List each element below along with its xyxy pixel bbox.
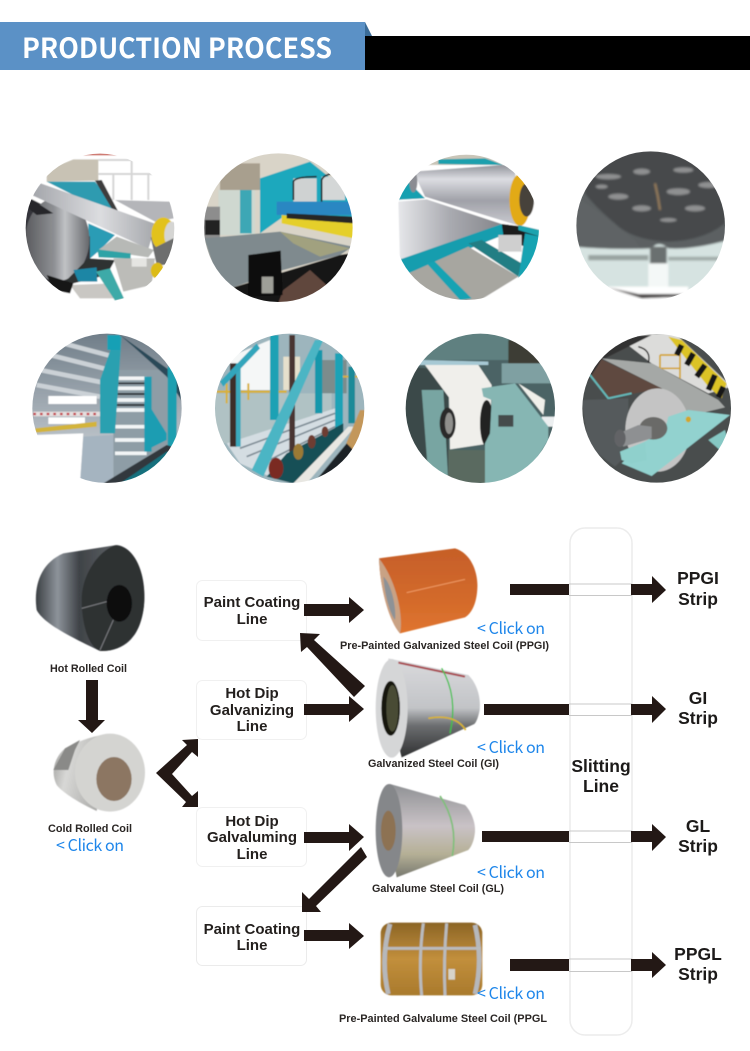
photo: galvanizing line rollers bbox=[213, 332, 367, 488]
arrow: GI to paint coating bbox=[300, 633, 365, 697]
box: paint coating line (top): Paint Coating bbox=[204, 594, 300, 611]
arrow: GL to paint coating bbox=[302, 847, 367, 912]
output: PPGL strip: Strip bbox=[678, 964, 718, 984]
link: click on: < Click on bbox=[477, 859, 545, 883]
link: click on: < Click on bbox=[477, 615, 545, 639]
output: PPGI strip: Strip bbox=[678, 589, 718, 609]
box: paint coating line (bottom): Line bbox=[237, 937, 267, 954]
photo: coil with shaft and yellow-black guard bbox=[580, 332, 733, 488]
arrows: cold rolled branch up and down bbox=[156, 739, 198, 807]
photo: steel coil uncoiling bbox=[23, 150, 179, 307]
box: hot dip galvaluming line: Line bbox=[237, 846, 267, 863]
output: GI strip: Strip bbox=[678, 708, 718, 728]
output: GI strip bbox=[678, 688, 718, 728]
output: PPGL strip bbox=[674, 944, 722, 984]
label: PPGL coil: Pre-Painted Galvalume Steel Coil (PPGL bbox=[339, 1013, 547, 1025]
box: hot dip galvaluming line bbox=[196, 808, 306, 866]
stage: cold rolled coil bbox=[48, 734, 145, 856]
output: GL strip bbox=[678, 816, 718, 856]
link: click on: < Click on bbox=[56, 832, 124, 856]
box: hot dip galvanizing line: Line bbox=[237, 718, 267, 735]
coil: PPGI orange bbox=[340, 548, 549, 652]
label: cold rolled coil: Cold Rolled Coil bbox=[48, 823, 132, 835]
photo: steel strip cooling tower bbox=[30, 332, 187, 488]
output: PPGI strip bbox=[677, 568, 719, 609]
photo: cutting machine with steel sheet bbox=[200, 150, 357, 307]
arrow: galvaluming to GL bbox=[304, 824, 364, 851]
output: GI strip: GI bbox=[689, 688, 707, 708]
box: hot dip galvaluming line: Galvaluming bbox=[207, 829, 297, 846]
photo: dark molten coating close-up bbox=[575, 150, 728, 303]
link: click on: < Click on bbox=[477, 980, 545, 1004]
box: hot dip galvanizing line: Galvanizing bbox=[210, 702, 294, 719]
arrow: paint coating to PPGI bbox=[304, 597, 364, 623]
box: hot dip galvanizing line: Hot Dip bbox=[225, 685, 279, 702]
label: GI coil: Galvanized Steel Coil (GI) bbox=[368, 758, 499, 770]
photo: white coil on recoiler bbox=[403, 332, 560, 488]
label: hot rolled coil: Hot Rolled Coil bbox=[50, 663, 127, 675]
photo: steel roll on conveyor bbox=[392, 153, 542, 303]
output: PPGL strip: PPGL bbox=[674, 944, 722, 964]
arrow: GI through slitting line bbox=[484, 696, 666, 723]
arrow: PPGL through slitting line bbox=[510, 952, 666, 978]
arrow: GL through slitting line bbox=[482, 824, 666, 851]
box: paint coating line (bottom): Paint Coating bbox=[204, 921, 300, 938]
output: PPGI strip: PPGI bbox=[677, 568, 719, 588]
output: GL strip: Strip bbox=[678, 836, 718, 856]
coil: GI galvanized bbox=[368, 658, 545, 770]
panel: slitting line: Line bbox=[583, 776, 619, 796]
section header banner bbox=[0, 22, 750, 70]
box: paint coating line (top): Line bbox=[237, 611, 267, 628]
box: paint coating line (top) bbox=[196, 580, 306, 640]
title: PRODUCTION PROCESS bbox=[22, 26, 332, 66]
arrow: paint coating to PPGL bbox=[304, 923, 364, 949]
output: GL strip: GL bbox=[686, 816, 710, 836]
box: hot dip galvanizing line bbox=[196, 680, 306, 740]
label: PPGI coil: Pre-Painted Galvanized Steel Coil (PPGI) bbox=[340, 640, 549, 652]
stage: hot rolled coil bbox=[36, 545, 144, 675]
arrow: hot rolled to cold rolled bbox=[78, 680, 105, 733]
coil: PPGL gold bbox=[339, 923, 547, 1025]
process flow diagram bbox=[36, 528, 722, 1035]
arrow: galvanizing to GI bbox=[304, 696, 364, 722]
link: click on: < Click on bbox=[477, 734, 545, 758]
panel: slitting line bbox=[570, 528, 632, 1035]
coil: GL galvalume bbox=[372, 784, 545, 895]
box: paint coating line (bottom) bbox=[196, 906, 306, 966]
label: GL coil: Galvalume Steel Coil (GL) bbox=[372, 883, 504, 895]
panel: slitting line: Slitting bbox=[571, 756, 631, 776]
arrow: PPGI through slitting line bbox=[510, 576, 666, 603]
box: hot dip galvaluming line: Hot Dip bbox=[225, 813, 279, 830]
